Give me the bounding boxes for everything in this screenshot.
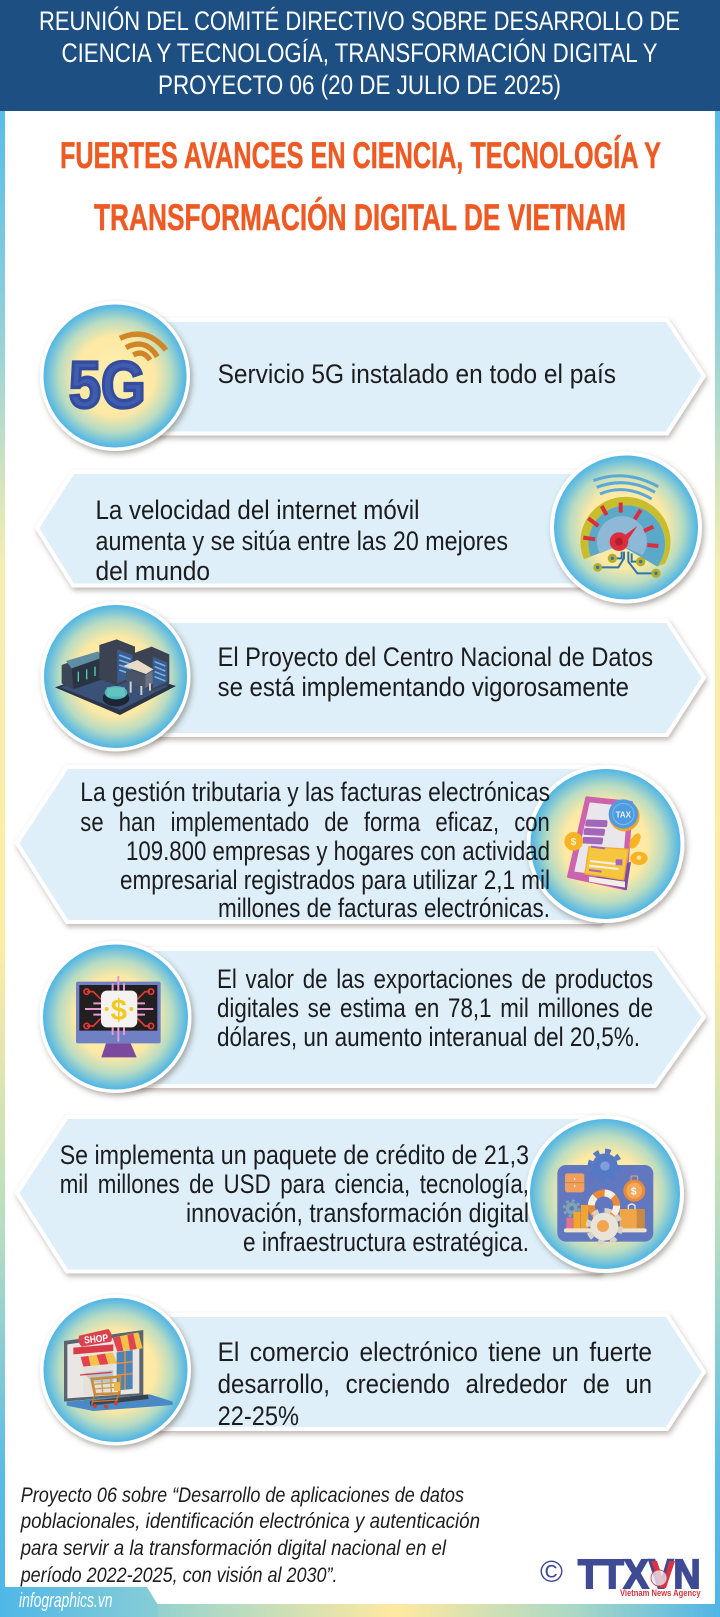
text: mil millones de USD para ciencia, tecnología, <box>60 1169 529 1199</box>
text <box>218 642 653 702</box>
source tab <box>0 1587 158 1617</box>
panel: e-commerce <box>40 1294 704 1446</box>
icon: tax phone: TAX <box>616 809 631 819</box>
text: se está implementando vigorosamente <box>218 672 629 702</box>
text: Se implementa un paquete de crédito de 21,3 <box>60 1140 529 1170</box>
arrow banner <box>17 1117 600 1272</box>
logo: TTXVN: Vietnam News Agency <box>620 1588 701 1599</box>
medallion <box>550 452 702 604</box>
text: El Proyecto del Centro Nacional de Datos <box>218 642 653 672</box>
text: dólares, un aumento interanual del 20,5%. <box>217 1022 640 1052</box>
medallion <box>40 941 192 1093</box>
icon: 5G signal: 5G <box>69 347 146 421</box>
medallion <box>40 301 190 451</box>
logo: TTXVN: © <box>540 1554 563 1589</box>
icon: data center <box>55 639 176 715</box>
footnote: para servir a la transformación digital nacional en el <box>20 1536 447 1560</box>
icon: credit and innovation board: $ <box>631 1186 637 1197</box>
arrow banner <box>17 767 600 922</box>
text: Servicio 5G instalado en todo el país <box>218 359 616 389</box>
text: desarrollo, creciendo alrededor de un <box>218 1369 652 1399</box>
icon: tax phone: $ <box>571 837 577 848</box>
footnote <box>20 1483 480 1587</box>
icon: online shop <box>64 1329 173 1411</box>
arrow banner <box>120 949 704 1086</box>
text: se han implementado de forma eficaz, con <box>80 807 550 837</box>
icon: tax phone <box>564 798 648 890</box>
footnote: Proyecto 06 sobre “Desarrollo de aplicaciones de datos <box>21 1483 464 1507</box>
arrow banner <box>120 1315 704 1429</box>
text: La velocidad del internet móvil <box>96 495 420 525</box>
icon: credit and innovation board <box>557 1151 653 1243</box>
text: 109.800 empresas y hogares con actividad <box>126 836 550 866</box>
icon: monitor with dollar chip <box>76 976 161 1057</box>
text: millones de facturas electrónicas. <box>218 893 550 923</box>
text <box>96 495 508 586</box>
arrow banner <box>120 621 704 735</box>
title <box>60 135 661 238</box>
text: innovación, transformación digital <box>186 1198 529 1228</box>
icon: monitor with dollar chip: $ <box>111 994 127 1027</box>
medallion <box>40 602 190 752</box>
text: La gestión tributaria y las facturas electrónicas <box>80 777 550 807</box>
text: aumenta y se sitúa entre las 20 mejores <box>96 526 508 556</box>
header band: PROYECTO 06 (20 DE JULIO DE 2025) <box>158 70 561 100</box>
header band <box>0 0 720 111</box>
logo: TTXVN: TTXVN <box>578 1551 700 1597</box>
text <box>60 1140 529 1257</box>
text: empresarial registrados para utilizar 2,1 mil <box>120 865 550 895</box>
icon: online shop: SHOP <box>84 1333 109 1346</box>
panel: national data center <box>40 602 704 752</box>
footnote: poblacionales, identificación electrónica y autenticación <box>20 1509 480 1533</box>
text: El comercio electrónico tiene un fuerte <box>218 1337 652 1367</box>
arrow banner <box>120 320 704 434</box>
panel: e-invoices <box>17 765 684 923</box>
medallion <box>40 1294 191 1446</box>
text <box>217 964 653 1052</box>
arrow banner <box>37 472 620 586</box>
icon: speedometer <box>580 476 670 578</box>
panel: digital exports <box>40 941 704 1093</box>
text <box>80 777 550 923</box>
text <box>218 1337 652 1431</box>
text: 22-25% <box>218 1401 299 1431</box>
panel: credit package <box>17 1115 684 1273</box>
source tab: infographics.vn <box>19 1590 112 1612</box>
text: e infraestructura estratégica. <box>243 1227 529 1257</box>
panel: 5G <box>40 301 704 451</box>
footnote: período 2022-2025, con visión al 2030”. <box>20 1563 337 1587</box>
medallion <box>526 1115 684 1273</box>
panel: mobile internet speed <box>37 452 702 604</box>
logo: TTXVN <box>540 1551 701 1599</box>
text: del mundo <box>96 556 210 586</box>
medallion <box>526 765 684 923</box>
